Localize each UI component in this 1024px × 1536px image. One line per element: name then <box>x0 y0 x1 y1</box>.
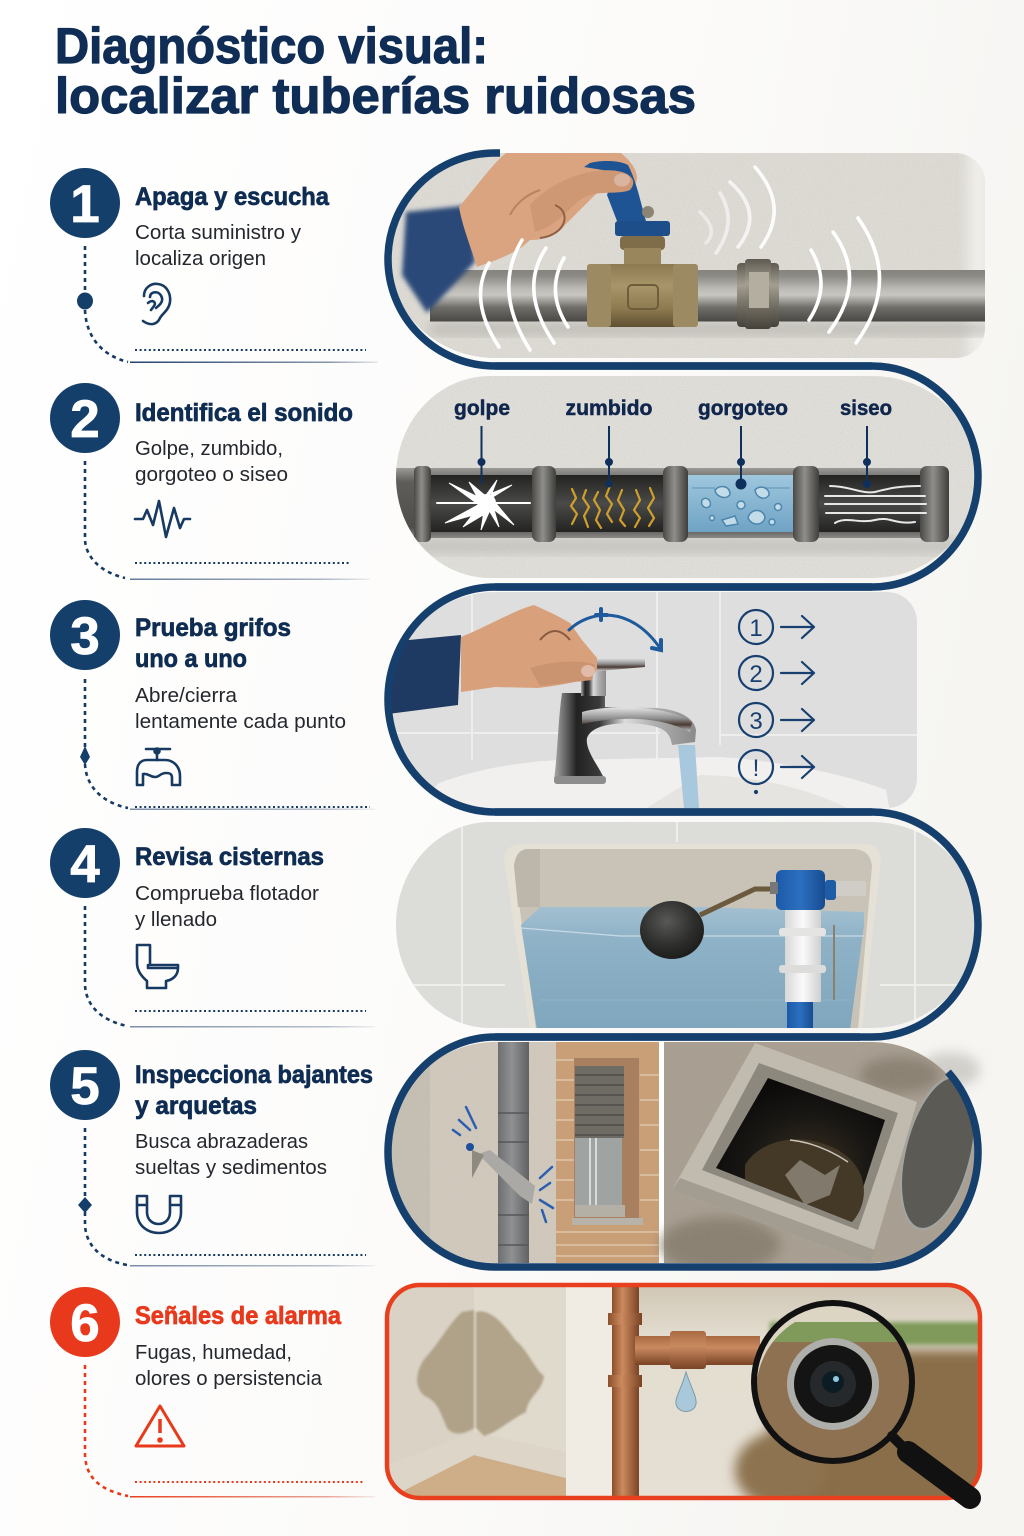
navy border <box>495 812 978 1037</box>
gorgoteo bubbles <box>692 487 790 526</box>
cistern tank <box>504 844 881 1030</box>
concrete manhole <box>672 1043 917 1263</box>
wall background <box>380 145 990 365</box>
black float ball <box>640 901 704 959</box>
step 6 description: Fugas, humedad, <box>135 1342 292 1364</box>
step 3: prueba grifos <box>50 600 375 810</box>
brick facade <box>556 1038 660 1268</box>
tiled wall <box>385 590 920 812</box>
open lid <box>887 1069 989 1237</box>
hand gripping lever <box>459 150 637 267</box>
icon: ear <box>143 284 170 324</box>
step 3 timeline connector <box>80 679 375 810</box>
step 5 description: sueltas y sedimentos <box>135 1157 327 1179</box>
step 3 description <box>135 685 346 733</box>
downpipe <box>498 1038 529 1268</box>
step 4: revisa cisternas <box>50 828 375 1028</box>
step 2 description <box>135 438 288 486</box>
copper pipes <box>608 1283 760 1503</box>
navy border <box>388 153 872 366</box>
step 2 description: gorgoteo o siseo <box>135 464 288 486</box>
step 4 number badge <box>50 828 120 898</box>
step 6 description <box>135 1342 323 1390</box>
siseo air lines <box>825 486 926 523</box>
soil <box>735 1322 995 1510</box>
step 4 number badge: 4 <box>70 835 100 894</box>
floor and baseboard <box>387 1432 566 1500</box>
panel: alarm signs illustration <box>385 1283 995 1510</box>
walls <box>385 1283 982 1503</box>
panel: tap test illustration <box>385 587 920 812</box>
step 1 description <box>135 222 301 270</box>
icon: u-trap <box>137 1196 181 1233</box>
compression nut <box>737 259 779 329</box>
step 1 description: localiza origen <box>135 248 266 270</box>
navy border <box>388 1037 978 1267</box>
icon: sound wave <box>135 501 190 537</box>
step 3 description: Abre/cierra <box>135 685 238 707</box>
step 3 heading <box>135 614 291 673</box>
float rod <box>700 889 778 915</box>
step 4 description <box>135 883 319 931</box>
sleeve <box>388 635 461 714</box>
step 2 description: Golpe, zumbido, <box>135 438 283 460</box>
sequence of numbered points: 2 <box>749 661 763 688</box>
divider <box>659 1038 664 1268</box>
facade wall <box>430 1042 556 1263</box>
sound labels: gorgoteo <box>698 397 788 420</box>
step 6 timeline connector <box>85 1365 375 1498</box>
step 5 heading: y arquetas <box>135 1092 257 1120</box>
magnifying glass <box>754 1303 970 1498</box>
water <box>521 907 864 1030</box>
sound labels: zumbido <box>566 397 652 420</box>
step 1 number badge <box>50 168 120 238</box>
pipe body <box>396 468 948 538</box>
title: Diagnóstico visual: <box>55 18 488 74</box>
ground <box>660 1038 984 1273</box>
blue lever handle <box>584 161 646 221</box>
step 4 heading: Revisa cisternas <box>135 843 324 871</box>
tiled wall <box>390 815 990 1035</box>
wall background <box>390 370 990 585</box>
sound labels <box>454 397 892 420</box>
lid shadow beyond frame <box>920 1052 980 1088</box>
icon: toilet <box>137 945 178 988</box>
step 6 number badge: 6 <box>70 1294 100 1353</box>
valve cap <box>615 206 670 236</box>
sequence of numbered points: 1 <box>749 615 763 642</box>
icon: warning triangle <box>136 1406 184 1446</box>
step 6 number badge <box>50 1287 120 1357</box>
panel: valve and pipe illustration <box>380 145 990 366</box>
step 6: señales de alarma <box>50 1287 375 1498</box>
panel: cistern illustration <box>390 812 990 1037</box>
sound labels: golpe <box>454 397 510 420</box>
sequence of numbered points: 3 <box>749 708 763 735</box>
step 2 heading: Identifica el sonido <box>135 399 353 427</box>
window with roller blind <box>572 1058 643 1225</box>
step 2 timeline connector <box>85 461 370 580</box>
step 5 description <box>135 1131 327 1179</box>
step 3 heading: uno a uno <box>135 645 247 673</box>
golpe burst <box>437 480 530 530</box>
step 6 description: olores o persistencia <box>135 1368 323 1390</box>
loose clamp <box>466 1143 535 1204</box>
title <box>55 18 696 124</box>
step 2 number badge: 2 <box>70 390 100 449</box>
step 5: inspecciona bajantes <box>50 1050 375 1266</box>
step 5 timeline connector <box>78 1128 375 1266</box>
icon: faucet <box>137 748 180 785</box>
step 5 number badge: 5 <box>70 1057 100 1116</box>
sound waves <box>481 167 880 350</box>
panel: downpipe and manhole illustration <box>385 1037 989 1273</box>
thumb and fingers <box>510 170 633 238</box>
sink basin <box>434 757 889 808</box>
sleeve <box>402 205 475 313</box>
water drop <box>676 1372 696 1412</box>
magnified inspection view <box>745 1300 920 1462</box>
couplers <box>414 466 949 542</box>
step 5 number badge <box>50 1050 120 1120</box>
pipe <box>430 270 990 334</box>
step 5 heading <box>135 1061 373 1120</box>
title: localizar tuberías ruidosas <box>55 68 696 124</box>
sound labels: siseo <box>840 397 892 420</box>
vibration marks <box>453 1107 553 1222</box>
damp stain <box>417 1310 544 1436</box>
step 3 number badge: 3 <box>70 607 100 666</box>
navy border <box>495 366 978 587</box>
red border <box>387 1285 980 1498</box>
step 3 description: lentamente cada punto <box>135 711 346 733</box>
step 1 number badge: 1 <box>70 175 100 234</box>
step 4 description: Comprueba flotador <box>135 883 319 905</box>
zumbido waves <box>571 486 654 528</box>
panel: four pipe sounds <box>390 366 990 587</box>
fill valve <box>770 870 866 1030</box>
rotation arrow <box>569 609 661 650</box>
step 1: apaga y escucha <box>50 168 378 363</box>
step 5 heading: Inspecciona bajantes <box>135 1061 373 1089</box>
step 4 description: y llenado <box>135 909 217 931</box>
step 4 timeline connector <box>85 906 375 1028</box>
navy border <box>388 587 872 812</box>
step 2 number badge <box>50 383 120 453</box>
step 3 heading: Prueba grifos <box>135 614 291 642</box>
hand on lever <box>461 605 597 692</box>
step 3 number badge <box>50 600 120 670</box>
step 5 description: Busca abrazaderas <box>135 1131 308 1153</box>
sequence of numbered points: ! <box>753 755 759 782</box>
sequence of numbered points <box>739 610 814 793</box>
ball valve body <box>587 236 698 327</box>
step 1 heading: Apaga y escucha <box>135 183 330 211</box>
side tube <box>833 925 835 1000</box>
callout pointers <box>478 426 870 488</box>
step 2: identifica el sonido <box>50 383 370 580</box>
step 1 timeline connector <box>77 246 378 363</box>
step 1 description: Corta suministro y <box>135 222 301 244</box>
step 6 heading: Señales de alarma <box>135 1302 342 1330</box>
water stream <box>678 745 699 808</box>
chrome faucet <box>554 658 696 784</box>
